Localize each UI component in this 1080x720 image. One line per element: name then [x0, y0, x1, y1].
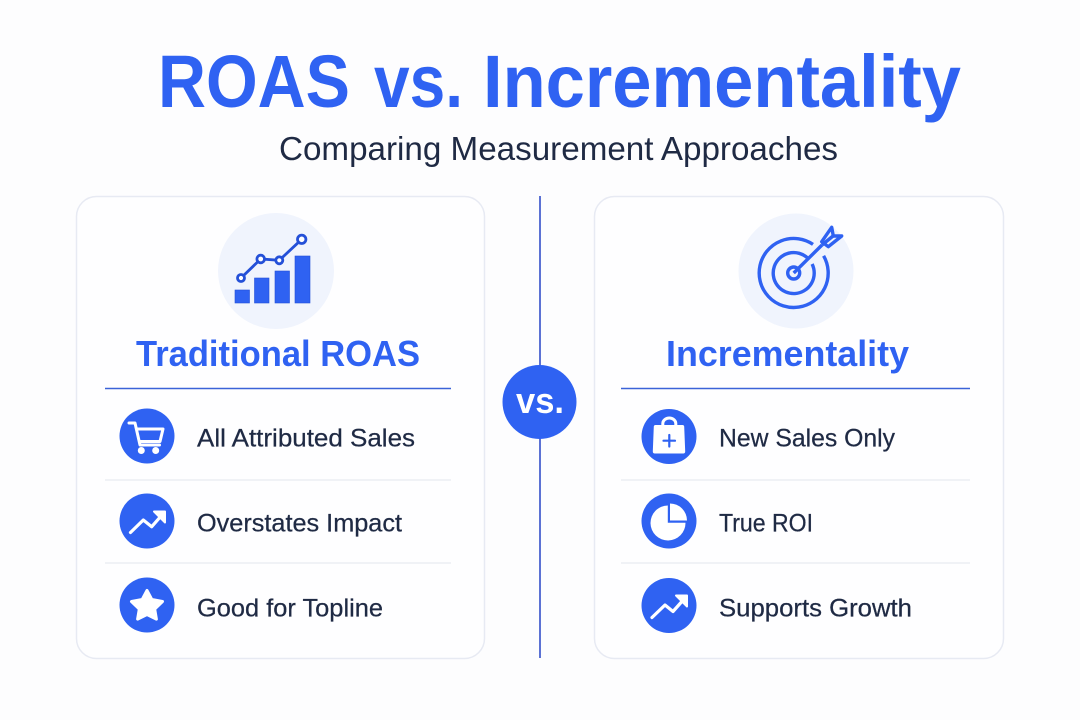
icon: pie chart: [642, 494, 696, 548]
panel: incrementality: [594, 196, 1004, 658]
badge: vs.: [502, 365, 576, 439]
title: Incrementality: [483, 40, 961, 123]
badge: vs.: vs.: [516, 380, 564, 421]
panel: traditional ROAS: [76, 196, 484, 658]
heading: Incrementality: Incrementality: [666, 333, 909, 374]
title: vs.: [374, 40, 463, 123]
title: [158, 40, 961, 123]
item: Overstates Impact: [120, 494, 402, 548]
icon: trending arrow: [642, 578, 696, 633]
icon: target with arrow: [738, 214, 854, 328]
item: Supports Growth: [642, 578, 912, 633]
item: True ROI: True ROI: [719, 510, 813, 538]
heading: Traditional ROAS: Traditional ROAS: [136, 333, 420, 374]
divider line: [539, 196, 541, 658]
item: Good for Topline: Good for Topline: [197, 594, 383, 622]
title: ROAS: [158, 40, 350, 123]
subtitle: Comparing Measurement Approaches: [279, 130, 838, 167]
item: Good for Topline: [120, 578, 383, 632]
item: New Sales Only: New Sales Only: [719, 424, 895, 452]
item: All Attributed Sales: All Attributed Sales: [197, 424, 415, 452]
item: True ROI: [642, 494, 813, 548]
item: Overstates Impact: Overstates Impact: [197, 510, 402, 538]
icon: trending arrow: [120, 494, 174, 548]
icon: star: [120, 578, 174, 632]
icon: shopping bag with plus: [642, 409, 696, 464]
item: All Attributed Sales: [120, 408, 415, 464]
icon: shopping cart: [120, 408, 174, 464]
item: New Sales Only: [642, 409, 895, 464]
icon: bar chart with trend line: [218, 213, 334, 329]
item: Supports Growth: Supports Growth: [719, 594, 912, 622]
